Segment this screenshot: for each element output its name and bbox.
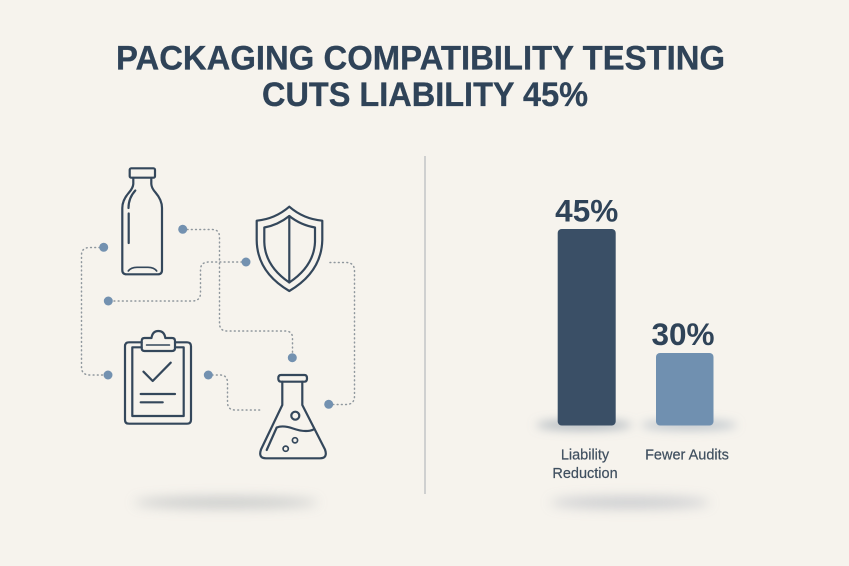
label: fewer audits: Fewer Audits — [645, 448, 729, 464]
bar: liability reduction 45%: 45% — [555, 192, 618, 228]
title — [116, 40, 725, 114]
bar: fewer audits 30% — [651, 316, 715, 426]
icon: bottle — [122, 168, 162, 274]
panel: process icons — [82, 168, 354, 508]
dotted connector: bottle to clipboard — [82, 243, 112, 380]
icon: clipboard with checkmark — [125, 331, 191, 424]
label: liability reduction: Liability — [561, 448, 610, 464]
divider — [424, 156, 426, 494]
label: liability reduction: Reduction — [552, 466, 618, 482]
chart base shadow — [550, 497, 710, 508]
bar: liability reduction 45% — [555, 192, 618, 426]
bar shadows — [536, 420, 737, 430]
title: CUTS LIABILITY 45% — [262, 76, 588, 114]
icon: flask — [260, 375, 326, 458]
bar: fewer audits 30%: 30% — [651, 316, 715, 352]
panel: bar chart — [536, 192, 737, 508]
icon: shield — [257, 207, 322, 291]
dotted connector: shield to flask — [324, 262, 354, 409]
label: liability reduction — [552, 448, 618, 482]
title: PACKAGING COMPATIBILITY TESTING — [116, 40, 725, 78]
dotted connector: clipboard to flask — [204, 370, 262, 410]
icon base shadow — [134, 497, 318, 508]
dotted connector: bottle to flask — [178, 225, 297, 362]
dotted connector: node to shield — [104, 258, 250, 306]
